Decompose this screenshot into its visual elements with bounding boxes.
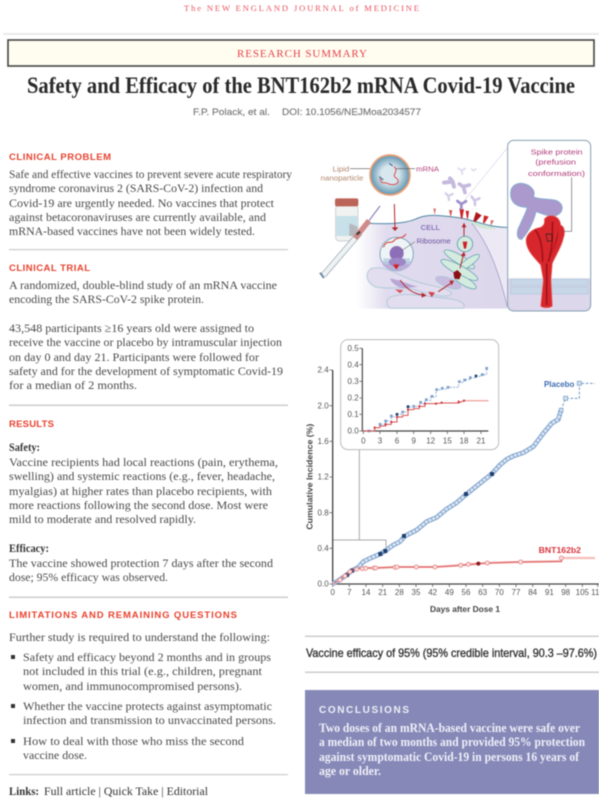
red proteins: [395, 208, 494, 297]
label: lipid nanoparticle: [321, 164, 363, 182]
text block: clinical trial: 43,548 participants ≥16 years old were assigned to: [9, 321, 254, 335]
label: spike protein: conformation): [528, 169, 586, 178]
series: placebo: [333, 381, 595, 584]
text block: efficacy: [9, 541, 273, 584]
y axis: 1.2: [318, 473, 329, 482]
arrows: translation path: [392, 204, 466, 298]
panel: results: [9, 419, 278, 584]
inset chart: first 21 days: 0.1: [348, 410, 359, 419]
bullet list: Whether the vaccine protects against asymptomatic: [23, 699, 272, 713]
byline: F.P. Polack, et al.: [193, 107, 270, 118]
inset chart: first 21 days: 21: [477, 437, 486, 446]
text block: safety: Safety:: [9, 440, 40, 454]
inset chart: first 21 days: 0.4: [348, 360, 359, 369]
text block: clinical trial: for a median of 2 months.: [9, 378, 137, 392]
y axis: [305, 366, 333, 589]
y axis: 1.6: [318, 437, 329, 446]
label: spike protein: Spike protein: [531, 147, 583, 156]
text block: clinical problem: [9, 167, 292, 238]
inset chart: first 21 days: 0.2: [348, 394, 359, 403]
x axis: 35: [412, 588, 421, 597]
x axis: 56: [462, 588, 471, 597]
label: spike protein: (prefusion: [535, 158, 576, 167]
label: lipid nanoparticle: nanoparticle: [321, 173, 363, 182]
bullet list: not included in this trial (e.g., children, pregnant: [23, 664, 263, 678]
series: BNT162b2: [333, 556, 595, 584]
connector to inset: [333, 449, 386, 547]
x axis: 91: [545, 588, 554, 597]
viral spike trimers: [444, 168, 479, 209]
label: CELL: CELL: [421, 223, 440, 232]
bullet list: women, and immunocompromised persons).: [23, 679, 242, 693]
inset chart: first 21 days: 0.3: [348, 377, 359, 386]
ribosome inset: [380, 237, 413, 271]
y axis: 0.8: [318, 508, 329, 517]
bullet list: Safety and efficacy beyond 2 months and in groups: [23, 650, 271, 664]
links row: Links:: [9, 784, 39, 798]
text block: clinical problem: Safe and effective vaccines to prevent severe acute respiratory: [9, 167, 292, 181]
lipid bilayer: [511, 279, 588, 294]
text block: safety: Vaccine recipients had local reactions (pain, erythema,: [9, 455, 278, 469]
inset chart: first 21 days: 6: [395, 437, 400, 446]
text block: clinical trial: receive the vaccine or placebo by intramuscular injection: [9, 335, 282, 349]
y axis: Cumulative Incidence (%): [305, 423, 315, 530]
x axis: 0: [330, 588, 335, 597]
text block: intro: Further study is required to understand the following:: [9, 630, 270, 644]
panel: spike protein inset: [508, 140, 591, 311]
panel: limitations and remaining questions: [9, 610, 276, 762]
text block: clinical problem: syndrome coronavirus 2 (SARS-CoV-2) infection and: [9, 181, 263, 195]
inset series: placebo: [363, 367, 488, 432]
x axis: [330, 584, 599, 614]
text block: efficacy: dose; 95% efficacy was observed.: [9, 570, 168, 584]
x axis: 28: [395, 588, 404, 597]
inset series: BNT162b2: [363, 399, 488, 431]
text block: clinical trial: on day 0 and day 21. Participants were followed for: [9, 350, 259, 364]
links row: Full article | Quick Take | Editorial: [44, 784, 209, 798]
inset chart: first 21 days: 12: [426, 437, 436, 446]
label: ribosome: Ribosome: [417, 237, 451, 246]
inset chart: first 21 days: [341, 340, 499, 450]
bullet list: How to deal with those who miss the second: [23, 734, 244, 748]
x axis: 21: [378, 588, 388, 597]
text block: conclusions: against symptomatic Covid-19 in persons 16 years of: [319, 750, 580, 764]
inset chart: first 21 days: 9: [411, 437, 416, 446]
inset chart: first 21 days: 15: [443, 437, 452, 446]
bullet list: infection and transmission to unvaccinated persons.: [23, 713, 276, 727]
syringe: [320, 206, 380, 278]
label: placebo: Placebo: [544, 379, 574, 389]
inset chart: first 21 days: 0.0: [348, 427, 359, 436]
x axis: 77: [512, 588, 521, 597]
header banner: [3, 33, 599, 66]
banner label: RESEARCH SUMMARY: [237, 48, 367, 60]
text block: clinical problem: Covid-19 are urgently needed. No vaccines that protect: [9, 196, 275, 210]
y axis: 0.0: [318, 580, 329, 589]
inset chart: first 21 days: 3: [378, 437, 383, 446]
lipid nanoparticle: [370, 155, 410, 195]
text block: clinical trial: A randomized, double-blind study of an mRNA vaccine: [9, 278, 277, 292]
text block: clinical problem: mRNA-based vaccines have not been widely tested.: [9, 224, 255, 238]
text block: clinical trial: [9, 278, 283, 392]
x axis: 70: [495, 588, 504, 597]
x axis: 98: [561, 588, 571, 597]
text block: efficacy: The vaccine showed protection 7 days after the second: [9, 556, 273, 570]
cell body: [357, 215, 507, 309]
panel: clinical trial: [9, 263, 283, 392]
text block: clinical problem: against betacoronaviruses are currently available, and: [9, 210, 266, 224]
text block: safety: mild to moderate and resolved rapidly.: [9, 512, 196, 526]
x axis: 63: [478, 588, 488, 597]
illustration: mRNA vaccine mechanism: [320, 140, 591, 311]
label: spike protein: [528, 147, 586, 178]
heading: clinical trial: CLINICAL TRIAL: [9, 263, 90, 274]
vesicle: [457, 236, 473, 252]
heading: limitations: LIMITATIONS AND REMAINING QUESTIONS: [9, 610, 237, 621]
text block: conclusions: [319, 721, 585, 778]
y axis: 2.4: [318, 366, 329, 375]
chart: cumulative incidence: [305, 340, 599, 614]
text block: safety: more reactions following the second dose. Most were: [9, 498, 268, 512]
x axis: 105: [576, 588, 590, 597]
text block: safety: [9, 440, 278, 526]
text block: clinical trial: safety and for the development of symptomatic Covid-19: [9, 364, 283, 378]
x axis: 7: [347, 588, 352, 597]
text block: conclusions: a median of two months and provided 95% protection: [319, 735, 585, 749]
label: mRNA: mRNA: [416, 164, 440, 173]
endoplasmic reticulum: [367, 268, 464, 308]
heading: clinical problem: CLINICAL PROBLEM: [9, 152, 111, 163]
label: BNT162b2: BNT162b2: [539, 545, 581, 555]
heading: results: RESULTS: [9, 419, 54, 430]
byline: DOI: 10.1056/NEJMoa2034577: [282, 107, 421, 118]
text block: conclusions: Two doses of an mRNA-based vaccine were safe over: [319, 721, 580, 735]
vial: [335, 198, 358, 241]
heading: conclusions: CONCLUSIONS: [319, 705, 409, 716]
panel: conclusions: [305, 690, 599, 794]
inset chart: first 21 days: 0: [361, 437, 366, 446]
red spike: [526, 216, 565, 308]
journal masthead: The NEW ENGLAND JOURNAL of MEDICINE: [184, 3, 419, 13]
byline: [193, 107, 421, 118]
bullet list: [11, 650, 276, 762]
x axis: 42: [428, 588, 438, 597]
x axis: 49: [445, 588, 454, 597]
x axis: 84: [528, 588, 538, 597]
x axis: Days after Dose 1: [430, 604, 500, 614]
bullet list: vaccine dose.: [23, 748, 87, 762]
text block: safety: swelling) and systemic reactions (e.g., fever, headache,: [9, 469, 275, 483]
inset chart: first 21 days: 0.5: [348, 344, 359, 353]
purple subunits: [511, 183, 562, 239]
golgi: [439, 247, 481, 291]
inset chart: first 21 days: 18: [460, 437, 469, 446]
panel: clinical problem: [9, 152, 292, 238]
text block: clinical trial: encoding the SARS-CoV-2 spike protein.: [9, 292, 204, 306]
label: lipid nanoparticle: Lipid: [333, 164, 349, 173]
y axis: 2.0: [318, 401, 329, 410]
text block: safety: myalgias) at higher rates than placebo recipients, with: [9, 484, 272, 498]
text block: conclusions: age or older.: [319, 764, 381, 778]
text block: efficacy: Efficacy:: [9, 541, 49, 555]
y axis: 0.4: [318, 544, 329, 553]
x axis: 14: [362, 588, 371, 597]
